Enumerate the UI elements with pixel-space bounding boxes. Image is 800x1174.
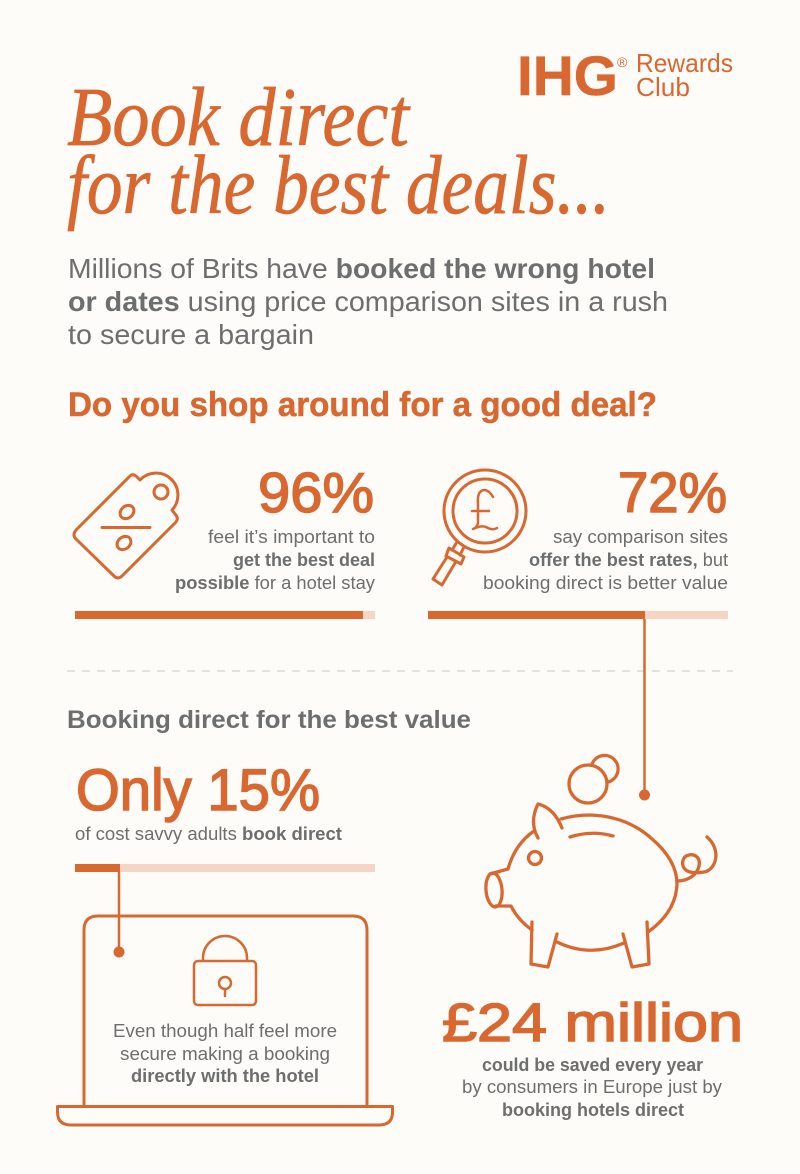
logo: IHG Rewards Club: ® — [617, 54, 628, 70]
progress bar: 15% — [75, 864, 375, 872]
panel: 96 percent — [74, 461, 375, 619]
logo: IHG Rewards Club: IHG — [517, 44, 618, 107]
icon: piggy bank with coins — [485, 755, 716, 967]
connector: 72% bar to piggy bank — [639, 619, 650, 800]
text: laptop message: directly with the hotel — [131, 1066, 319, 1086]
connector: 15% bar to laptop — [114, 872, 124, 958]
progress bar: 96% — [75, 611, 375, 619]
icon: price tag — [74, 473, 178, 578]
intro text: Millions of Brits have booked the wrong hotel — [68, 253, 655, 284]
text: savings: could be saved every year — [482, 1055, 703, 1075]
heading: shop around: Do you shop around for a good deal? — [68, 386, 657, 424]
logo: IHG Rewards Club — [517, 44, 733, 107]
icon: laptop — [58, 916, 392, 1125]
heading: booking direct: Booking direct for the best value — [67, 706, 471, 734]
text: best deal: feel it’s important to — [208, 527, 375, 547]
progress bar: 72% — [428, 611, 728, 619]
text: savings — [462, 1055, 722, 1120]
logo: IHG Rewards Club: Rewards — [636, 48, 733, 78]
intro text — [68, 253, 668, 350]
intro text: to secure a bargain — [68, 319, 314, 350]
stat: 24 million: £24 million — [442, 993, 743, 1053]
title: for the best deals... — [67, 139, 610, 232]
icon: magnifier with pound sign — [433, 470, 526, 585]
title: Book direct — [67, 71, 411, 164]
text: laptop message: secure making a booking — [120, 1044, 330, 1064]
text: laptop message — [113, 1021, 337, 1086]
text: comparison sites: booking direct is better value — [483, 573, 728, 593]
text: comparison sites: say comparison sites — [553, 527, 728, 547]
stat: 96%: 96% — [258, 461, 374, 525]
text: comparison sites: offer the best rates, but — [529, 550, 728, 570]
text: savings: by consumers in Europe just by — [462, 1077, 722, 1097]
text: book direct: of cost savvy adults book direct — [75, 824, 342, 844]
panel: 72 percent — [428, 461, 728, 619]
stat: 72%: 72% — [618, 461, 727, 525]
icon: padlock — [194, 936, 256, 1005]
text: comparison sites — [483, 527, 728, 593]
stat: only 15%: Only 15% — [76, 758, 320, 823]
text: best deal: get the best deal — [233, 550, 375, 570]
text: best deal — [175, 527, 375, 593]
intro text: or dates using price comparison sites in a rush — [68, 286, 668, 317]
text: savings: booking hotels direct — [502, 1100, 684, 1120]
title — [67, 71, 610, 232]
logo: IHG Rewards Club: Club — [636, 72, 690, 102]
text: laptop message: Even though half feel more — [113, 1021, 337, 1041]
text: best deal: possible for a hotel stay — [175, 573, 375, 593]
